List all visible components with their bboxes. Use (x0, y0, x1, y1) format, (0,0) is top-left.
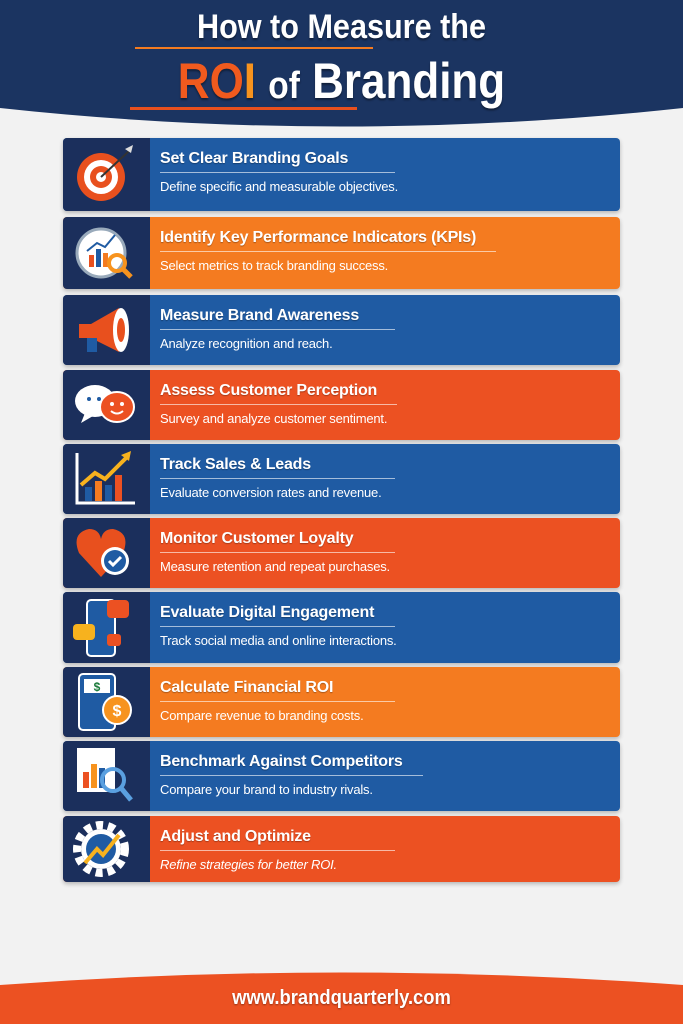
footer (0, 972, 683, 1024)
row 7 (63, 592, 620, 663)
row 8: Calculate Financial ROI (160, 679, 333, 696)
row 4: Survey and analyze customer sentiment. (160, 411, 387, 426)
row 9: Compare your brand to industry rivals. (160, 782, 373, 797)
row 3: Measure Brand Awareness (160, 307, 359, 324)
footer url: www.brandquarterly.com (232, 987, 451, 1009)
row 2 (63, 217, 620, 289)
row 6 (63, 518, 620, 588)
row 1: Define specific and measurable objectives. (160, 179, 398, 194)
row 2: Identify Key Performance Indicators (KPIs) (160, 229, 476, 246)
row 3 (63, 295, 620, 365)
row 5: Evaluate conversion rates and revenue. (160, 485, 382, 500)
row 8: Compare revenue to branding costs. (160, 708, 364, 723)
row 10: Adjust and Optimize (160, 828, 311, 845)
row 4 (63, 370, 620, 440)
row 6: Monitor Customer Loyalty (160, 530, 353, 547)
row 7: Track social media and online interactions. (160, 633, 397, 648)
row 9: Benchmark Against Competitors (160, 753, 403, 770)
header (0, 0, 683, 126)
row 4: Assess Customer Perception (160, 382, 377, 399)
row 10: Refine strategies for better ROI. (160, 857, 337, 872)
row 2: Select metrics to track branding success. (160, 258, 388, 273)
row 1 (63, 138, 620, 211)
row 8: $ (113, 703, 122, 720)
row 7: Evaluate Digital Engagement (160, 604, 374, 621)
row 5: Track Sales & Leads (160, 456, 311, 473)
row 8 (63, 667, 620, 737)
title line 1: How to Measure the (197, 8, 486, 46)
row 10 (63, 816, 620, 882)
row 8: $ (94, 680, 101, 694)
row 6: Measure retention and repeat purchases. (160, 559, 390, 574)
row 1: Set Clear Branding Goals (160, 150, 348, 167)
row 5 (63, 444, 620, 514)
row 9 (63, 741, 620, 811)
title line 2: ROI of Branding (178, 53, 505, 109)
row 3: Analyze recognition and reach. (160, 336, 333, 351)
